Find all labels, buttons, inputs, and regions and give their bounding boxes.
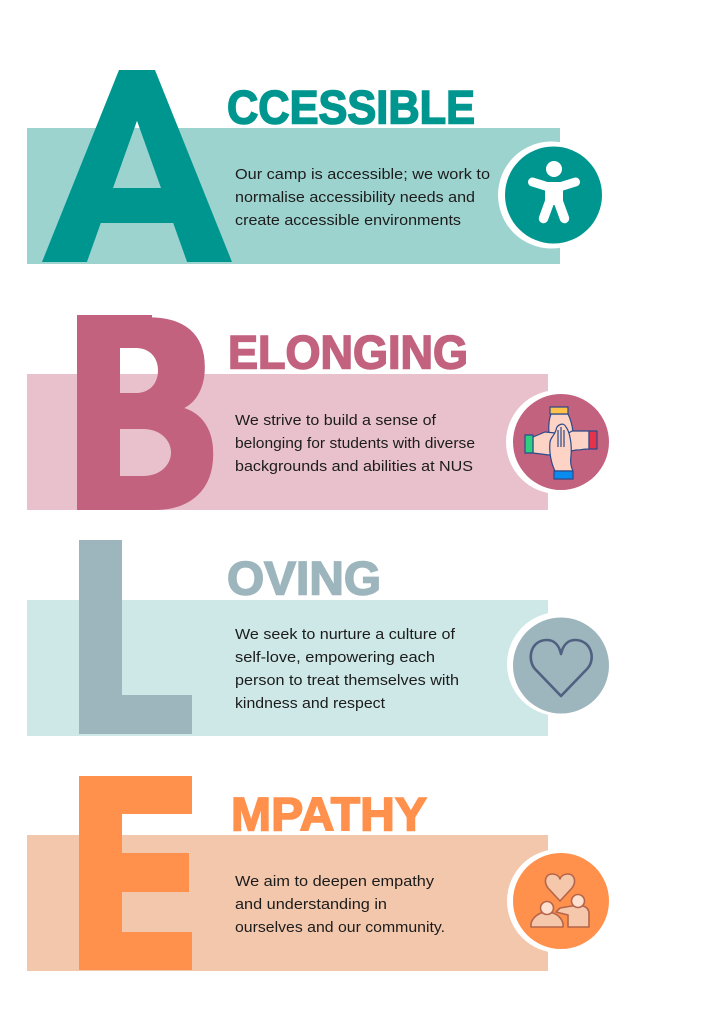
panel: empathy — [27, 719, 611, 1024]
heading: elonging: ELONGING — [228, 326, 468, 378]
text block: loving: kindness and respect — [235, 695, 386, 712]
text block: empathy — [235, 873, 445, 936]
big letter B: B — [67, 261, 221, 565]
icon: accessibility person — [498, 142, 605, 248]
band: accessible — [27, 128, 560, 264]
text block: empathy: ourselves and our community. — [235, 919, 445, 936]
text block: loving: self-love, empowering each — [235, 649, 435, 666]
text block: accessible: create accessible environments — [235, 212, 461, 229]
text block: empathy: We aim to deepen empathy — [235, 873, 435, 890]
big letter A: A — [34, 10, 240, 321]
heading: oving: OVING — [227, 552, 381, 604]
text block: accessible — [235, 166, 490, 229]
text block: belonging: We strive to build a sense of — [235, 412, 437, 429]
text block: accessible: normalise accessibility needs and — [235, 189, 475, 206]
panel: loving — [27, 482, 611, 794]
band: empathy — [27, 835, 548, 971]
big letter L: L — [66, 482, 196, 794]
big letter A — [42, 70, 232, 262]
panel: accessible — [27, 70, 602, 264]
heading: ccessible: CCESSIBLE — [227, 80, 475, 134]
big letter E: E — [66, 719, 198, 1024]
text block: belonging: backgrounds and abilities at NUS — [235, 458, 473, 475]
icon: heart outline — [507, 612, 611, 716]
icon: people and heart — [507, 849, 611, 953]
icon: stacked hands — [506, 390, 610, 494]
band: belonging — [27, 374, 548, 510]
text block: belonging — [235, 412, 475, 475]
text block: accessible: Our camp is accessible; we work to — [235, 166, 490, 183]
text block: empathy: and understanding in — [235, 896, 387, 913]
text block: belonging: belonging for students with diverse — [235, 435, 475, 452]
panel: belonging — [27, 261, 610, 565]
text block: loving: We seek to nurture a culture of — [235, 626, 456, 643]
band: loving — [27, 600, 548, 736]
text block: loving: person to treat themselves with — [235, 672, 459, 689]
heading: mpathy: MPATHY — [231, 788, 427, 840]
text block: loving — [235, 626, 459, 712]
